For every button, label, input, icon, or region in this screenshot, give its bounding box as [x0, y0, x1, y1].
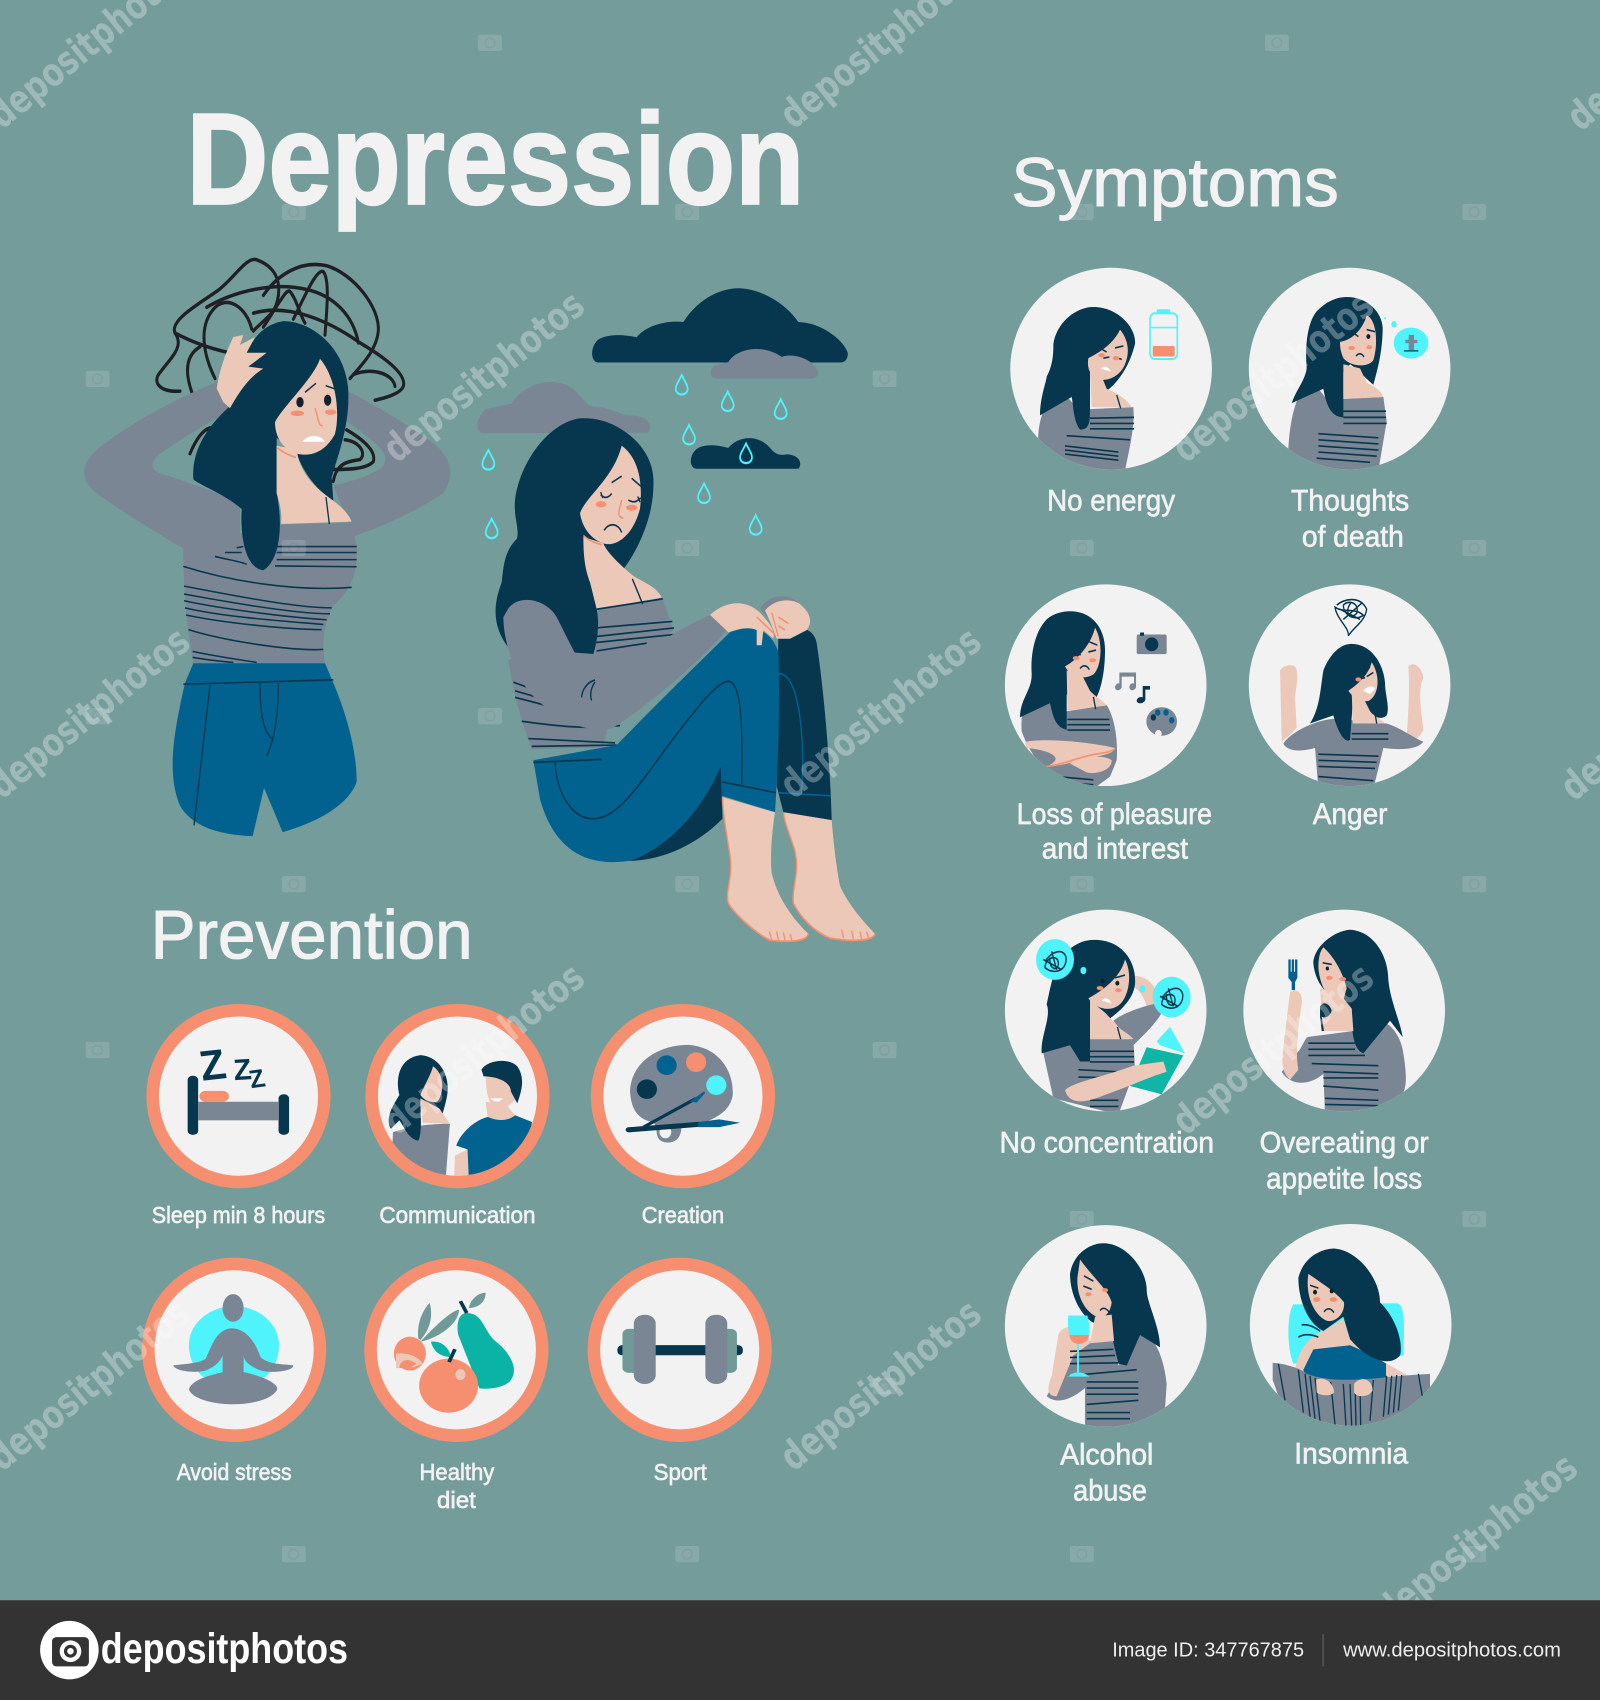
jeans: [533, 628, 779, 862]
near foot: [722, 797, 808, 941]
symptom figure: loss of pleasure: [1020, 611, 1177, 789]
icon: healthy diet fruits: [394, 1293, 514, 1413]
symptom figure: overeating: [1282, 930, 1406, 1115]
watermark text: depositphotos: [1164, 283, 1383, 472]
icon: sleep bed: Z: [232, 1053, 253, 1087]
torso: [183, 523, 357, 663]
symptom figure: alcohol abuse: [1047, 1243, 1167, 1429]
gray knee behind hand: [760, 596, 800, 617]
hair: [193, 321, 348, 570]
scribble above head: [157, 259, 404, 481]
footer logo: depositphotos: [101, 1625, 348, 1672]
prevention labels: [152, 1202, 724, 1513]
hand: [217, 335, 267, 408]
dark cloud small: [691, 438, 800, 469]
symptom labels: of death: [1302, 521, 1404, 553]
symptom labels: Anger: [1313, 799, 1388, 831]
far leg: [777, 628, 832, 820]
prevention labels: Avoid stress: [177, 1459, 292, 1485]
gray cloud overlapping: [711, 349, 818, 379]
torso: [508, 599, 673, 749]
jeans seams: [533, 681, 776, 819]
finger lines: [757, 613, 788, 637]
face details: [583, 476, 642, 545]
watermark text: depositphotos: [771, 1291, 990, 1480]
prevention labels: Healthy: [420, 1459, 495, 1485]
sweater stripes: [183, 547, 357, 662]
footer logo: [40, 1621, 348, 1679]
heading: prevention: Prevention: [151, 897, 473, 973]
heading: symptoms: Symptoms: [1011, 145, 1339, 221]
symptom labels: Overeating or: [1260, 1127, 1429, 1159]
symptom labels: No energy: [1047, 486, 1175, 518]
website: www.depositphotos.com: [1342, 1639, 1561, 1662]
icon: sleep bed: Z: [246, 1064, 268, 1094]
prevention rings: [148, 1010, 769, 1436]
icon: creation palette and brushes: [629, 1045, 740, 1143]
symptom labels: abuse: [1073, 1476, 1147, 1508]
symptom labels: Thoughts: [1291, 486, 1409, 518]
prevention labels: Creation: [642, 1202, 724, 1228]
face details: [277, 383, 337, 524]
arm creases: [582, 579, 663, 700]
neck and chest: [277, 446, 352, 524]
neck and chest: [583, 537, 662, 609]
symptom labels: No concentration: [999, 1127, 1214, 1159]
hands: [710, 603, 774, 645]
icon: communication, woman and man talking: [389, 1055, 532, 1179]
right arm: [333, 390, 450, 537]
face: [580, 446, 641, 544]
symptom figure: no energy: [1037, 307, 1177, 470]
symptom figure: thoughts of death: [1288, 297, 1428, 470]
jeans seams: [183, 680, 333, 825]
symptom labels: Insomnia: [1294, 1439, 1409, 1471]
icon: sport dumbbell: [617, 1315, 743, 1384]
icon: avoid stress meditation: [173, 1294, 293, 1404]
footer divider: [1322, 1634, 1324, 1666]
watermark camera marks: [86, 35, 1486, 1562]
symptom labels: Loss of pleasure: [1017, 799, 1212, 831]
footer bar: [0, 1600, 1600, 1700]
symptom circles: [1005, 268, 1451, 1427]
prevention labels: Sport: [654, 1459, 707, 1485]
title: Depression: [186, 86, 804, 232]
watermark text: depositphotos: [1164, 955, 1383, 1144]
jeans: [173, 663, 357, 836]
symptom figure: anger: [1280, 600, 1423, 789]
symptom labels: Alcohol: [1060, 1440, 1153, 1472]
illustration: stressed woman with tangled thoughts: [84, 259, 450, 836]
illustration: sad seated woman with rain clouds: [477, 288, 875, 941]
far leg seams: [778, 673, 831, 796]
prevention labels: Communication: [379, 1202, 536, 1228]
gray cloud left: [477, 382, 650, 433]
left arm: [84, 380, 240, 552]
sweater stripes: [513, 621, 675, 746]
near arm: [503, 600, 727, 729]
face: [275, 359, 337, 455]
far foot: [783, 812, 875, 940]
symptom labels: appetite loss: [1266, 1163, 1422, 1195]
foot outlines and toes: [722, 797, 875, 941]
image id: Image ID: 347767875: [1112, 1639, 1304, 1662]
icon: sleep bed: [188, 1040, 289, 1135]
prevention labels: diet: [437, 1487, 477, 1513]
icon: sleep bed: Z: [196, 1040, 229, 1090]
watermark text: depositphotos: [771, 619, 990, 808]
prevention labels: Sleep min 8 hours: [152, 1202, 325, 1228]
hair: [496, 418, 653, 654]
raindrops: [482, 375, 787, 538]
symptom labels: [999, 486, 1429, 1508]
watermark text: depositphotos: [375, 283, 593, 472]
dark cloud large: [592, 288, 848, 362]
symptom labels: and interest: [1042, 834, 1188, 866]
watermark text: depositphotos: [375, 955, 593, 1144]
symptom figure: no concentration: [1036, 939, 1191, 1115]
jeans shadow: [630, 767, 722, 861]
symptom figure: insomnia: [1273, 1249, 1430, 1437]
second hand: [765, 600, 810, 639]
